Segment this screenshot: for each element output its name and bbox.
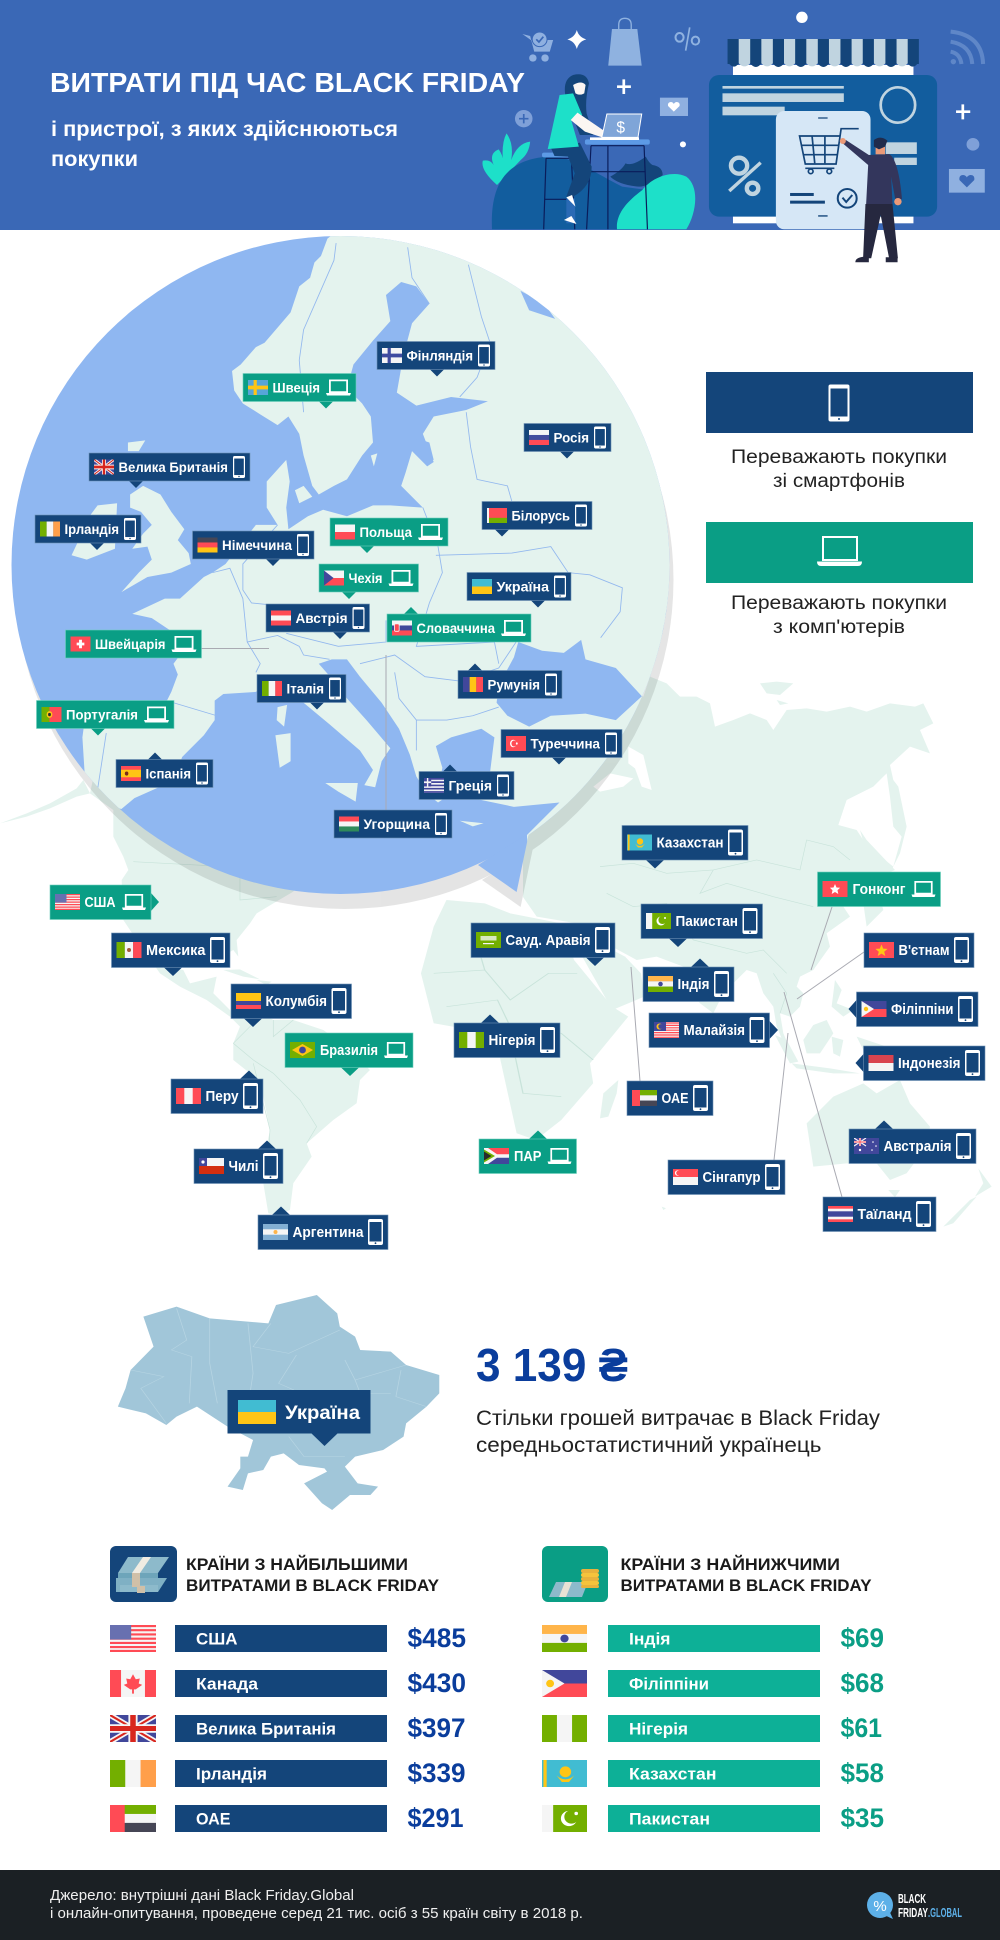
logo: BLACK	[898, 1891, 926, 1906]
legend: computers: з комп'ютерів	[773, 617, 905, 638]
label: Бразилія	[285, 1033, 413, 1076]
row: Велика Британія: $397	[408, 1713, 466, 1743]
label: Швейцарія: Швейцарія	[95, 637, 166, 652]
label: Чилі: Чилі	[228, 1159, 258, 1175]
row: Індія: Індія	[629, 1630, 670, 1648]
label: Іспанія: Іспанія	[146, 766, 191, 782]
label: Індія	[643, 958, 734, 1002]
label: Бразилія: Бразилія	[320, 1043, 378, 1059]
row: ОАЕ	[110, 1803, 464, 1833]
icon: woman at laptop on stool	[542, 74, 650, 229]
label: Індія: Індія	[678, 977, 710, 993]
source text: Джерело: внутрішні дані Black Friday.Global	[50, 1887, 354, 1904]
label: Чехія	[319, 564, 418, 599]
label: Росія: Росія	[554, 430, 589, 446]
label: Гонконг	[818, 872, 940, 906]
label: Сінгапур: Сінгапур	[702, 1170, 761, 1186]
label: Польща	[330, 518, 448, 553]
label: США: США	[84, 895, 116, 911]
label: Португалія: Португалія	[66, 708, 138, 722]
label: Аргентина: Аргентина	[292, 1225, 364, 1241]
label: Швеція	[243, 374, 356, 408]
description: середньостатистичний українець	[476, 1434, 822, 1457]
row: ОАЕ: ОАЕ	[196, 1810, 230, 1828]
background world map	[0, 673, 992, 1227]
legend: computers: Переважають покупки	[731, 593, 947, 614]
label: ОАЕ: ОАЕ	[662, 1091, 689, 1107]
logo: FRIDAY	[898, 1905, 928, 1920]
label: Індонезія: Індонезія	[898, 1056, 960, 1072]
row: Казахстан: Казахстан	[629, 1764, 716, 1784]
label: Пакистан	[641, 904, 762, 947]
label: Словаччина	[387, 607, 531, 642]
label: Малайзія	[649, 1013, 778, 1048]
label: Україна: Україна	[496, 580, 550, 594]
region: South-East Asia, Australia, Oceania	[600, 980, 992, 1227]
label: Австралія	[849, 1120, 976, 1164]
label: Румунія	[458, 664, 562, 698]
icon: woman at laptop on stool: $	[616, 120, 625, 137]
row: ОАЕ: $291	[408, 1803, 464, 1833]
row: Ірландія	[110, 1758, 466, 1788]
label: Швеція: Швеція	[272, 380, 320, 396]
label: Ірландія	[35, 515, 141, 550]
subtitle: і пристрої, з яких здійснюються	[51, 118, 398, 141]
row: Філіппіни: Філіппіни	[629, 1674, 709, 1694]
connector: Угорщина	[385, 655, 387, 810]
label: Сінгапур	[668, 1160, 785, 1194]
label: Пакистан: Пакистан	[676, 914, 738, 930]
connector: ОАЕ	[631, 967, 640, 1081]
heading: ВИТРАТАМИ В BLACK FRIDAY	[186, 1577, 439, 1595]
label: США	[50, 885, 159, 920]
label: Україна callout: Україна	[285, 1403, 360, 1424]
panel: highest spending	[110, 1546, 466, 1833]
label: Велика Британія	[89, 453, 250, 488]
region: Eurasia	[523, 673, 933, 1057]
label: Сауд. Аравія: Сауд. Аравія	[506, 933, 590, 949]
label: Росія	[524, 424, 611, 458]
header illustration: shopping scene	[482, 12, 985, 262]
connector: Сінгапур	[774, 1033, 788, 1160]
label: Румунія: Румунія	[488, 678, 540, 692]
big number: 3 139 ₴	[476, 1339, 628, 1391]
label: Таїланд: Таїланд	[858, 1207, 912, 1223]
title: ВИТРАТИ ПІД ЧАС BLACK FRIDAY	[50, 67, 525, 98]
row: Ірландія: $339	[408, 1758, 466, 1788]
icon: storefront	[709, 39, 937, 223]
icon: phone screen with cart	[776, 111, 871, 229]
subtitle: покупки	[51, 148, 138, 171]
label: Мексика	[112, 933, 230, 976]
row: Ірландія: Ірландія	[196, 1764, 267, 1784]
label: Словаччина: Словаччина	[416, 621, 495, 636]
row: Канада: $430	[408, 1668, 466, 1698]
footer	[0, 1870, 1000, 1940]
label: Сауд. Аравія	[471, 923, 615, 966]
connector: В'єтнам	[797, 952, 864, 999]
region: Africa and Arabia	[421, 900, 644, 1140]
row: США	[110, 1623, 466, 1653]
row: Індія: $69	[840, 1623, 884, 1653]
icon: man pointing	[840, 138, 902, 262]
label: Білорусь: Білорусь	[512, 508, 570, 524]
row: Канада	[110, 1668, 466, 1698]
source text: і онлайн-опитування, проведене серед 21 тис. осіб з 55 країн світу в 2018 р.	[50, 1905, 583, 1922]
row: Філіппіни	[542, 1668, 884, 1698]
label: Казахстан	[622, 826, 748, 868]
label: Велика Британія: Велика Британія	[118, 460, 228, 475]
label: Австралія: Австралія	[884, 1139, 952, 1155]
label: В'єтнам	[864, 933, 974, 968]
row: Казахстан	[542, 1758, 884, 1788]
label: Колумбія: Колумбія	[266, 994, 327, 1010]
description: Стільки грошей витрачає в Black Friday	[476, 1407, 881, 1430]
label: Греція: Греція	[448, 778, 492, 794]
region: North and South America	[0, 747, 370, 1215]
legend: smartphones	[706, 372, 973, 492]
label: В'єтнам: В'єтнам	[898, 943, 950, 959]
row: Пакистан	[542, 1803, 884, 1833]
label: Чехія: Чехія	[348, 571, 382, 586]
panel: Ukraine map	[118, 1295, 439, 1510]
panel: lowest spending	[542, 1546, 884, 1833]
icon: plants and hill	[482, 133, 695, 229]
label: Австрія: Австрія	[296, 611, 348, 626]
label: Малайзія: Малайзія	[684, 1023, 745, 1039]
panel: Europe map bubble	[12, 236, 670, 894]
legend: computers	[706, 522, 973, 638]
label: Угорщина: Угорщина	[364, 817, 430, 832]
heading: КРАЇНИ З НАЙБІЛЬШИМИ	[186, 1555, 408, 1574]
label: Іспанія	[116, 752, 213, 788]
label: ПАР	[479, 1130, 576, 1174]
label: Таїланд	[823, 1197, 936, 1232]
row: Нігерія: $61	[840, 1713, 882, 1743]
label: Індонезія	[856, 1046, 985, 1080]
label: Нігерія: Нігерія	[488, 1033, 536, 1049]
label: Мексика: Мексика	[146, 943, 206, 959]
label: Філіппіни: Філіппіни	[891, 1002, 954, 1018]
connector: Таїланд	[784, 992, 842, 1197]
label: Німеччина: Німеччина	[222, 538, 292, 553]
row: Велика Британія	[110, 1713, 466, 1743]
label: Італія: Італія	[286, 682, 324, 696]
label: Перу: Перу	[206, 1089, 238, 1105]
header banner	[0, 0, 1000, 230]
legend: smartphones: зі смартфонів	[773, 471, 905, 492]
label: Україна callout	[228, 1390, 370, 1446]
label: Фінляндія	[377, 342, 495, 376]
logo: %	[873, 1898, 887, 1915]
row: Канада: Канада	[196, 1674, 259, 1694]
label: Аргентина	[258, 1206, 388, 1250]
heading: КРАЇНИ З НАЙНИЖЧИМИ	[620, 1555, 840, 1574]
legend: smartphones: Переважають покупки	[731, 447, 947, 468]
heading: ВИТРАТАМИ В BLACK FRIDAY	[620, 1577, 872, 1595]
icon: small floating shopping icons	[515, 12, 985, 193]
label: ПАР: ПАР	[514, 1149, 542, 1165]
connector: Швейцарія	[201, 648, 269, 650]
region: Europe land	[72, 236, 670, 842]
icon: money and coins	[542, 1546, 608, 1602]
label: Перу	[171, 1070, 263, 1114]
label: Греція	[419, 764, 514, 800]
row: Казахстан: $58	[840, 1758, 884, 1788]
label: Туреччина: Туреччина	[530, 736, 600, 752]
row: Індія	[542, 1623, 884, 1653]
row: Пакистан: $35	[840, 1803, 884, 1833]
row: Пакистан: Пакистан	[629, 1810, 710, 1828]
row: Велика Британія: Велика Британія	[196, 1720, 336, 1738]
label: Швейцарія	[66, 630, 202, 658]
label: Угорщина	[334, 810, 452, 838]
label: Чилі	[194, 1140, 283, 1184]
label: Австрія	[266, 604, 370, 639]
logo	[867, 1891, 962, 1920]
label: Колумбія	[231, 984, 352, 1027]
label: Італія	[257, 674, 346, 710]
label: Німеччина	[192, 531, 314, 566]
row: Філіппіни: $68	[840, 1668, 884, 1698]
logo: .GLOBAL	[928, 1905, 962, 1920]
icon: stacks of money	[110, 1546, 177, 1602]
label: Філіппіни	[848, 992, 978, 1026]
label: Туреччина	[501, 730, 622, 764]
label: Білорусь	[482, 502, 592, 536]
row: США: США	[196, 1630, 238, 1648]
label: Ірландія: Ірландія	[64, 522, 119, 537]
row: Нігерія: Нігерія	[629, 1720, 688, 1738]
shadow of map bubble	[16, 251, 674, 909]
label: Фінляндія: Фінляндія	[406, 348, 473, 364]
row: США: $485	[408, 1623, 466, 1653]
label: Україна	[467, 572, 571, 608]
row: Нігерія	[542, 1713, 882, 1743]
connector: Гонконг	[811, 907, 832, 970]
label: ОАЕ	[627, 1081, 713, 1116]
label: Гонконг: Гонконг	[852, 882, 906, 898]
label: Нігерія	[454, 1014, 560, 1058]
label: Казахстан: Казахстан	[656, 836, 724, 852]
label: Португалія	[36, 700, 174, 736]
label: Польща: Польща	[360, 525, 412, 540]
